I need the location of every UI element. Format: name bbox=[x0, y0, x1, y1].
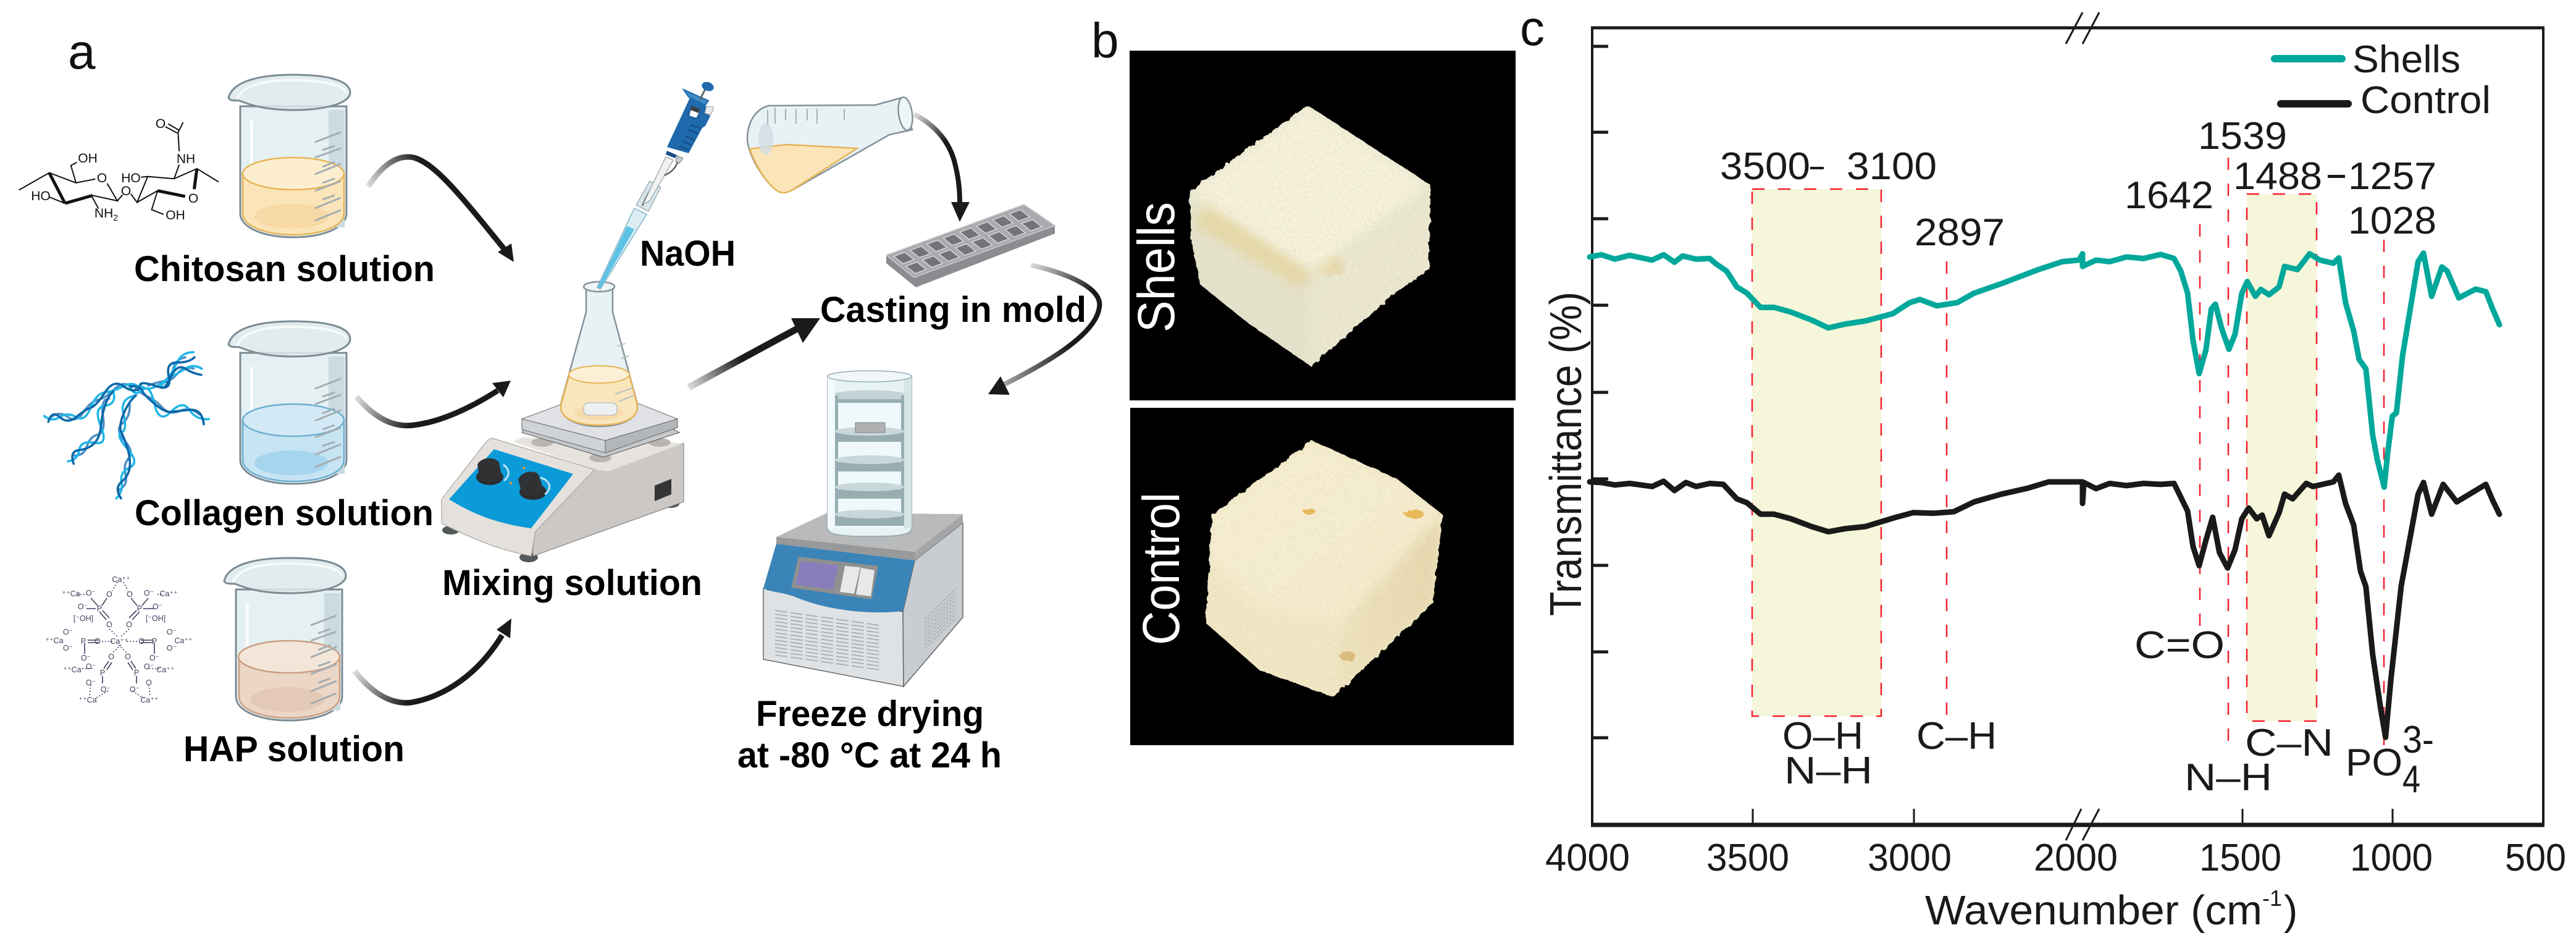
label: casting in mold: Casting in mold bbox=[820, 290, 1086, 330]
peak wavenumber labels: 3100 bbox=[1847, 145, 1937, 188]
label: chitosan solution: Chitosan solution bbox=[134, 249, 435, 289]
functional group labels: C=O bbox=[2134, 624, 2225, 667]
icon: pouring flask bbox=[747, 96, 915, 193]
peak wavenumber labels: 1642 bbox=[2125, 174, 2213, 217]
peak wavenumber labels: 2897 bbox=[1915, 211, 2005, 254]
HAP chemical structure: P bbox=[100, 669, 105, 677]
beaker: chitosan solution bbox=[229, 75, 350, 237]
functional group labels: O–H bbox=[1782, 715, 1863, 758]
HAP chemical structure: O⁻ bbox=[130, 685, 140, 694]
chitosan chemical structure bbox=[19, 117, 219, 222]
HAP chemical structure: Ca⁺⁺ bbox=[112, 575, 130, 584]
chitosan chemical structure: HO bbox=[121, 171, 141, 185]
HAP chemical structure: Ca⁺⁺ bbox=[140, 696, 159, 704]
chitosan chemical structure: NH bbox=[177, 152, 195, 166]
functional group labels: C–H bbox=[1916, 715, 1997, 758]
curve: Shells spectrum bbox=[1590, 253, 2499, 487]
panel label a: a bbox=[68, 24, 96, 79]
x-axis tick labels: 500 bbox=[2505, 837, 2566, 879]
HAP chemical structure: P bbox=[81, 637, 86, 646]
label: Control: Control bbox=[1132, 492, 1190, 645]
x-axis tick labels: 4000 bbox=[1545, 837, 1630, 879]
chitosan chemical structure: OH bbox=[166, 208, 185, 222]
peak wavenumber labels: 1028 bbox=[2348, 200, 2436, 242]
legend: Control bbox=[2360, 79, 2491, 122]
HAP chemical structure: O bbox=[106, 620, 112, 629]
label: collagen solution: Collagen solution bbox=[135, 493, 434, 533]
HAP chemical structure: O⁻ bbox=[149, 654, 159, 662]
x-axis tick labels: 3500 bbox=[1706, 837, 1789, 879]
panel label c: c bbox=[1520, 1, 1545, 56]
HAP chemical structure: O bbox=[146, 678, 152, 687]
HAP chemical structure: ⁺⁺Ca bbox=[62, 589, 80, 598]
y-axis title: Transmittance (%) bbox=[1542, 292, 1591, 616]
arrow: mixing to casting bbox=[689, 318, 820, 387]
legend bbox=[2275, 38, 2491, 122]
band: 3500-3100 highlight bbox=[1752, 189, 1881, 716]
HAP chemical structure bbox=[45, 575, 193, 704]
x-axis title: Wavenumber (cm bbox=[1925, 887, 2262, 934]
HAP chemical structure: ⁺⁺Ca bbox=[78, 696, 97, 704]
photo: control scaffold bbox=[1130, 408, 1514, 745]
peak wavenumber labels: 3500 bbox=[1720, 145, 1810, 188]
functional group labels bbox=[1782, 624, 2434, 801]
band: 1488-1257 highlight bbox=[2247, 194, 2317, 721]
HAP chemical structure: O⁻ bbox=[86, 678, 96, 687]
icon: Erlenmeyer flask with stir bar bbox=[561, 282, 637, 426]
curve: Control spectrum bbox=[1590, 475, 2499, 737]
label: mixing solution: Mixing solution bbox=[442, 563, 702, 603]
beaker: HAP solution bbox=[224, 558, 346, 720]
arrow: chitosan to mixing bbox=[368, 157, 514, 262]
arrow: casting to freeze drying bbox=[988, 265, 1099, 395]
label: freeze drying conditions: at -80 °C at 24 h bbox=[737, 735, 1002, 775]
functional group labels: C–N bbox=[2245, 722, 2333, 764]
photo: shells scaffold bbox=[1127, 51, 1516, 400]
HAP chemical structure: O bbox=[138, 637, 145, 646]
HAP chemical structure: O⁻ bbox=[153, 602, 162, 611]
panel a: fabrication workflow bbox=[19, 24, 1099, 775]
peak wavenumber labels: 1488 bbox=[2233, 155, 2322, 198]
HAP chemical structure: O bbox=[94, 637, 101, 646]
HAP chemical structure: O bbox=[125, 652, 131, 661]
arrow: HAP to mixing bbox=[355, 619, 511, 703]
icon: magnetic stirrer bbox=[441, 389, 684, 562]
panel c: FTIR chart bbox=[1520, 1, 2566, 934]
functional group labels: N–H bbox=[2184, 756, 2272, 799]
HAP chemical structure: O⁻ bbox=[101, 685, 111, 694]
HAP chemical structure: P bbox=[97, 604, 102, 613]
HAP chemical structure: [⁻OH] bbox=[146, 614, 166, 623]
chitosan chemical structure: O bbox=[156, 117, 166, 131]
icon: collagen fibres bbox=[44, 352, 209, 499]
label: freeze drying conditions: Freeze drying bbox=[756, 694, 984, 734]
HAP chemical structure: P bbox=[152, 637, 157, 646]
HAP chemical structure: [⁻OH] bbox=[73, 614, 93, 623]
HAP chemical structure: O⁻ bbox=[81, 654, 91, 662]
functional group labels: 4 bbox=[2402, 758, 2420, 801]
HAP chemical structure: O⁻ bbox=[144, 662, 154, 671]
chitosan chemical structure: O bbox=[121, 184, 131, 198]
functional group labels: N–H bbox=[1784, 750, 1873, 792]
HAP chemical structure: O⁻ bbox=[78, 602, 88, 611]
icon: pipette bbox=[597, 80, 715, 289]
chitosan chemical structure: O bbox=[188, 192, 198, 206]
HAP chemical structure: Ca⁺⁺ bbox=[159, 589, 178, 598]
panel label b: b bbox=[1091, 13, 1119, 68]
arrow: flask into mold bbox=[914, 114, 970, 222]
peak wavenumber labels: 1539 bbox=[2198, 115, 2287, 158]
HAP chemical structure: O⁻ bbox=[63, 644, 73, 652]
icon: casting mold bbox=[886, 205, 1055, 287]
chitosan chemical structure: O bbox=[97, 171, 107, 185]
peak marker lines bbox=[1947, 158, 2384, 746]
HAP chemical structure: O⁻ bbox=[63, 628, 73, 636]
x-axis tick labels: 3000 bbox=[1868, 837, 1952, 879]
beaker: collagen solution bbox=[229, 321, 350, 484]
chitosan chemical structure: OH bbox=[78, 151, 98, 166]
x-axis tick labels bbox=[1545, 837, 2566, 879]
HAP chemical structure: O bbox=[108, 652, 114, 661]
panel b: scaffold photographs bbox=[1091, 13, 1516, 745]
label: NaOH: NaOH bbox=[640, 234, 736, 274]
HAP chemical structure: Ca⁺⁺ bbox=[156, 665, 175, 674]
x-axis title: ) bbox=[2284, 887, 2297, 934]
HAP chemical structure: O bbox=[126, 620, 132, 629]
HAP chemical structure: O⁻ bbox=[167, 628, 177, 636]
chitosan chemical structure: NH bbox=[94, 206, 113, 221]
HAP chemical structure: O⁻ bbox=[86, 589, 96, 598]
label: Shells: Shells bbox=[1127, 202, 1185, 332]
HAP chemical structure: Ca⁺⁺ bbox=[174, 636, 193, 645]
chitosan chemical structure: HO bbox=[31, 189, 51, 203]
HAP chemical structure: ⁺⁺Ca bbox=[45, 636, 64, 645]
chart axes bbox=[1591, 12, 2545, 840]
HAP chemical structure: P bbox=[134, 669, 139, 677]
label: freeze drying conditions bbox=[737, 694, 1002, 775]
HAP chemical structure: O⁻ bbox=[144, 589, 154, 598]
HAP chemical structure: O⁻ bbox=[86, 662, 96, 671]
peak wavenumber labels bbox=[1720, 115, 2436, 254]
x-axis title: -1 bbox=[2262, 885, 2282, 911]
icon: freeze dryer bbox=[763, 371, 963, 686]
HAP chemical structure: O bbox=[127, 590, 133, 599]
HAP chemical structure: O⁻ bbox=[167, 644, 177, 652]
chitosan chemical structure: 2 bbox=[113, 213, 118, 222]
x-axis tick labels: 2000 bbox=[2034, 837, 2118, 879]
arrow: collagen to mixing bbox=[356, 381, 511, 426]
HAP chemical structure: ⁺⁺Ca bbox=[63, 665, 82, 674]
HAP chemical structure: O bbox=[106, 590, 112, 599]
functional group labels: PO bbox=[2346, 741, 2402, 784]
legend: Shells bbox=[2352, 38, 2461, 81]
HAP chemical structure: Ca⁺⁺ bbox=[110, 637, 128, 646]
x-axis tick labels: 1000 bbox=[2350, 837, 2433, 879]
label: HAP solution: HAP solution bbox=[183, 729, 405, 769]
HAP chemical structure: P bbox=[137, 604, 142, 613]
peak wavenumber labels: 1257 bbox=[2348, 155, 2436, 198]
x-axis tick labels: 1500 bbox=[2199, 837, 2281, 879]
functional group labels: 3- bbox=[2402, 719, 2434, 761]
